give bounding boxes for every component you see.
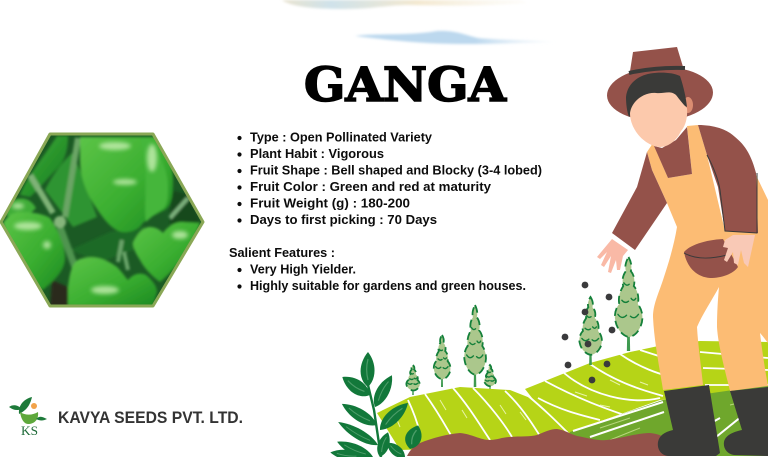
- cloud: blue streak: [355, 31, 556, 44]
- hand: left, scattering seeds: [597, 239, 628, 273]
- hat: crown: [628, 47, 687, 84]
- pepper: big top center: [80, 137, 173, 232]
- text block: variety specifications: Fruit Weight (g) : 180-200: [250, 196, 410, 210]
- soil mound: [407, 429, 690, 456]
- hair: [626, 73, 687, 117]
- text block: salient features: Salient Features :: [229, 245, 335, 260]
- cloud: top pale band: [282, 0, 528, 9]
- logo text: company name: KAVYA SEEDS PVT. LTD.: [58, 409, 243, 427]
- hat band: [629, 68, 685, 73]
- trees: background row: [406, 305, 496, 395]
- bowl: [684, 239, 738, 278]
- hexagon frame: [1, 134, 203, 306]
- shirt: reaching arm: [612, 152, 667, 250]
- text block: salient features: [229, 245, 526, 293]
- text block: variety specifications: Plant Habit : Vigorous: [250, 146, 384, 161]
- trees: foreground pair: [579, 257, 642, 365]
- hat: brim: [606, 65, 714, 123]
- boots: [658, 385, 720, 456]
- shirt: chest panel: [654, 127, 692, 178]
- logo: Kavya Seeds emblem: [9, 397, 47, 438]
- shirt: raised arm: [698, 125, 758, 233]
- field: right hill: [525, 341, 768, 440]
- field: dark green strip: [560, 385, 768, 456]
- plant: fern leaves: [330, 352, 425, 457]
- pepper: back middle: [45, 153, 97, 227]
- ear: [683, 97, 693, 113]
- seeds falling: [562, 282, 615, 383]
- logo: Kavya Seeds emblem: KS: [21, 423, 38, 438]
- highlights: [12, 142, 188, 294]
- text block: salient features: Very High Yielder.: [250, 262, 356, 276]
- pepper: lower left: [3, 212, 65, 290]
- pepper: small left: [6, 198, 36, 216]
- stems: [30, 175, 53, 213]
- text block: variety specifications: Days to first picking : 70 Days: [250, 212, 437, 227]
- hand: right, holding bowl: [723, 235, 755, 267]
- pepper: right: [133, 222, 200, 282]
- face: [630, 92, 687, 147]
- pepper: bottom center: [68, 257, 157, 306]
- title: GANGA: [304, 58, 507, 113]
- field: left hill: [377, 387, 600, 450]
- photo: green bell peppers in hexagon: [0, 130, 205, 310]
- text block: variety specifications: [237, 130, 542, 227]
- pepper: top left: [20, 136, 68, 197]
- text block: variety specifications: Fruit Color : Green and red at maturity: [250, 179, 492, 194]
- text block: salient features: Highly suitable for gardens and green houses.: [250, 278, 526, 293]
- text block: variety specifications: Type : Open Pollinated Variety: [250, 130, 433, 144]
- text block: variety specifications: Fruit Shape : Bell shaped and Blocky (3-4 lobed): [250, 162, 542, 178]
- farmer figure: [597, 47, 768, 456]
- overalls: legs and bib: [647, 125, 768, 391]
